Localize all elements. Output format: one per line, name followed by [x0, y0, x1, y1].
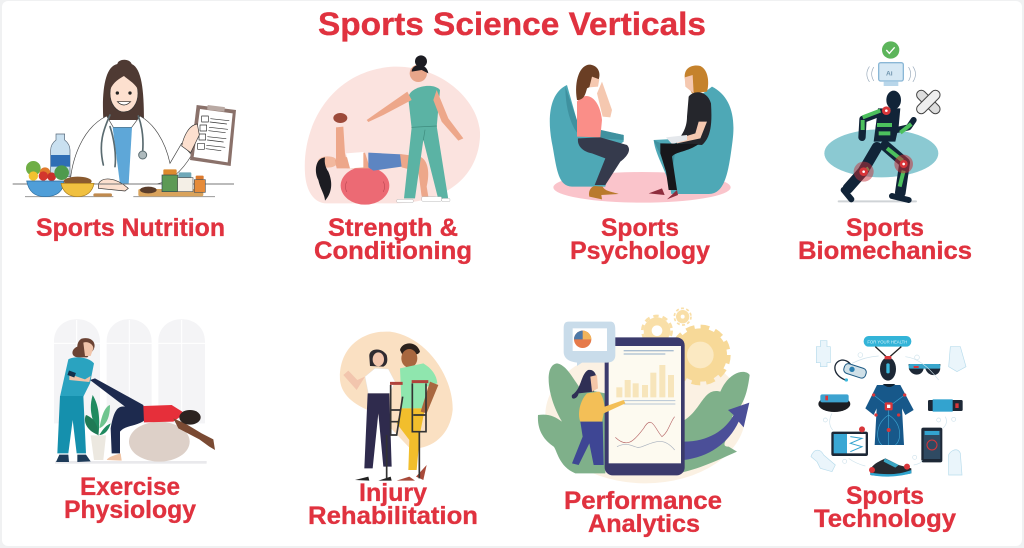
icon: fitness band — [818, 394, 850, 412]
label: performance analytics: Analytics — [588, 510, 700, 538]
label: injury rehabilitation: Rehabilitation — [308, 502, 478, 530]
icon: smart belt — [928, 399, 963, 412]
icon: smart shoe — [869, 458, 911, 477]
icon: water bottle — [51, 134, 70, 177]
panel: exercise physiology — [54, 319, 215, 524]
label: sports biomechanics: Biomechanics — [798, 237, 972, 265]
illustration: trainer and woman on ball — [305, 55, 480, 205]
figure: runner silhouette — [844, 91, 914, 200]
icon: vegetable bowl — [26, 161, 69, 197]
label: strength and conditioning: Strength & — [328, 214, 458, 242]
panel: sports nutrition — [13, 60, 236, 242]
label: sports biomechanics: Sports — [846, 214, 924, 242]
label: injury rehabilitation — [308, 479, 478, 530]
icon: health banner pendant — [864, 336, 911, 381]
icon: speech bubble with pie chart — [564, 322, 615, 366]
icon: leaves — [538, 363, 750, 473]
icon: health banner pendant: FOR YOUR HEALTH — [867, 339, 907, 344]
illustration: nutritionist at table — [13, 60, 236, 197]
title: Sports Science Verticals — [318, 6, 706, 42]
label: performance analytics: Performance — [564, 487, 722, 515]
icon: bandage — [915, 88, 942, 116]
label: sports biomechanics — [798, 214, 972, 265]
label: exercise physiology: Exercise — [80, 473, 180, 501]
panel: strength and conditioning — [305, 55, 480, 265]
icon: pale outline accessories — [811, 341, 966, 475]
icon: trend arrow — [684, 403, 749, 460]
icon: green check — [882, 41, 899, 59]
icon: potted plant — [85, 395, 111, 460]
label: sports psychology — [570, 214, 710, 265]
label: exercise physiology — [64, 473, 196, 524]
figure: analyst woman — [572, 370, 625, 465]
label: sports nutrition: Sports Nutrition — [36, 214, 225, 242]
icon: AI monitor — [867, 63, 915, 86]
label: sports psychology: Psychology — [570, 237, 710, 265]
icon: earpiece — [835, 360, 867, 382]
panel: sports technology — [811, 336, 966, 533]
label: sports technology: Technology — [814, 505, 956, 533]
illustration: runner with sensors — [824, 41, 942, 202]
icon: smart shirt — [865, 384, 914, 445]
illustration: therapy session — [550, 65, 733, 203]
label: exercise physiology: Physiology — [64, 496, 196, 524]
panel: sports biomechanics — [798, 41, 972, 265]
illustration: helper and man on crutches — [340, 332, 453, 481]
label: strength and conditioning: Conditioning — [314, 237, 472, 265]
illustration: wearable devices around smart shirt — [811, 336, 966, 477]
label: strength and conditioning — [314, 214, 472, 265]
icon: AI monitor: Ai — [886, 70, 893, 77]
illustration: assisted leg stretch on ball — [54, 319, 215, 464]
panel: injury rehabilitation — [308, 332, 478, 530]
label: sports technology: Sports — [846, 482, 924, 510]
label: sports psychology: Sports — [601, 214, 679, 242]
icon: supplement jars — [138, 169, 205, 196]
icon: gears — [642, 308, 728, 383]
icon: grain bowl — [61, 177, 94, 197]
illustration: analyst with phone dashboard — [538, 308, 750, 483]
icon: clipboard checklist — [190, 105, 236, 166]
icon: smart glasses — [909, 364, 940, 375]
panel: performance analytics — [538, 308, 750, 538]
label: sports technology — [814, 482, 956, 533]
icon: smartphone — [921, 428, 942, 462]
panel: sports psychology — [550, 65, 733, 265]
label: injury rehabilitation: Injury — [359, 479, 427, 507]
label: performance analytics — [564, 487, 722, 538]
icon: tablet — [831, 426, 868, 456]
icon: phone — [605, 337, 685, 475]
